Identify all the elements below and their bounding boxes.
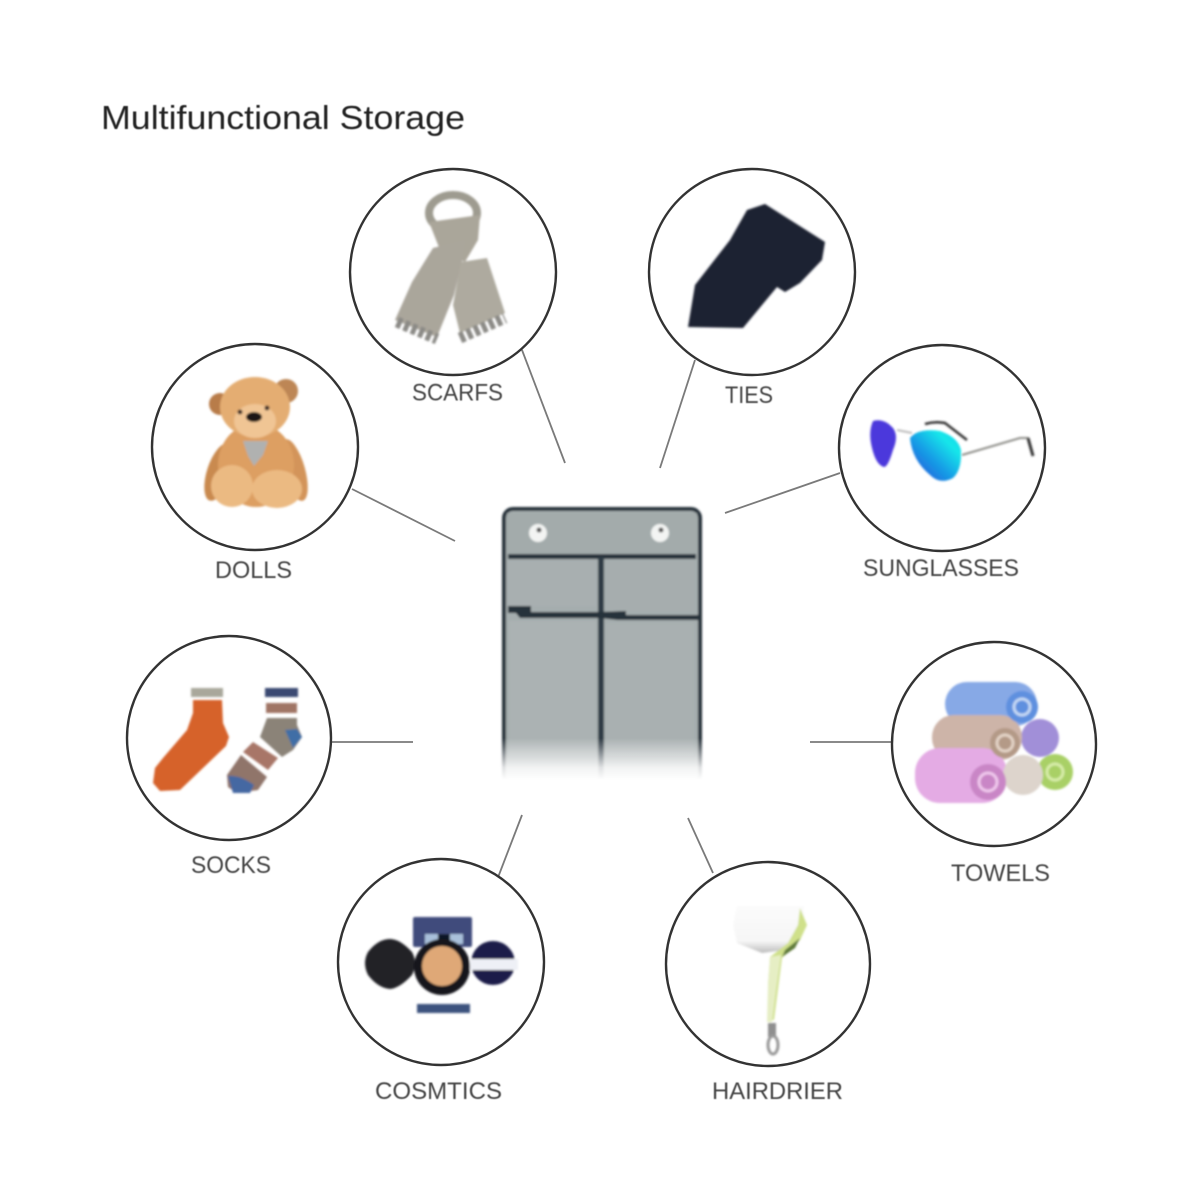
connector: cosmetics — [497, 815, 522, 880]
icon: tie — [688, 204, 825, 328]
item: scarfs — [350, 169, 556, 406]
central product: hanging storage organizer — [495, 509, 710, 792]
item: socks — [127, 636, 331, 879]
item: sunglasses — [839, 345, 1045, 582]
icon: hair dryer — [733, 906, 807, 1054]
icon: sunglasses — [870, 420, 1033, 481]
connector: sunglasses — [725, 473, 840, 513]
connector: ties — [660, 360, 695, 468]
label: SCARFS: SCARFS — [412, 380, 503, 406]
connector: hairdrier — [688, 818, 713, 873]
connector: socks — [332, 741, 413, 743]
label: SUNGLASSES: SUNGLASSES — [863, 555, 1019, 582]
label: SOCKS: SOCKS — [191, 852, 271, 879]
label: TIES: TIES — [725, 382, 773, 409]
item: towels — [892, 642, 1096, 887]
label: DOLLS: DOLLS — [215, 557, 292, 584]
connector: dolls — [352, 489, 455, 541]
icon: cosmetics compact set — [365, 917, 518, 1013]
title: Multifunctional Storage — [101, 99, 465, 136]
item: cosmetics — [338, 859, 544, 1105]
label: COSMTICS: COSMTICS — [375, 1078, 502, 1105]
icon: socks — [153, 688, 302, 793]
label: HAIRDRIER: HAIRDRIER — [712, 1078, 843, 1105]
item: ties — [649, 169, 855, 409]
item: hairdrier — [666, 862, 870, 1105]
icon: rolled towels — [915, 682, 1073, 803]
connector: towels — [810, 741, 892, 743]
label: TOWELS: TOWELS — [951, 860, 1050, 887]
connector: scarfs — [522, 350, 565, 463]
item: dolls — [152, 344, 358, 584]
icon: scarf — [395, 195, 505, 339]
icon: teddy bear — [198, 377, 313, 508]
